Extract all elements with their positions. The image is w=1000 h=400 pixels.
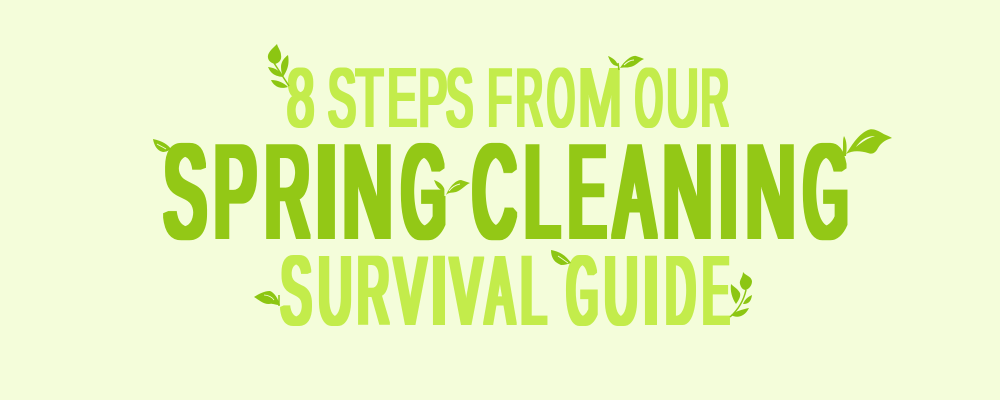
title line 1: 8 STEPS FROM OUR: U (667, 52, 699, 145)
title line 2: SPRING CLEANING: N (663, 119, 712, 266)
icon: leaf between G and C (434, 180, 470, 196)
title line 3: SURVIVAL GUIDE: E (703, 236, 729, 345)
title line 1: 8 STEPS FROM OUR: R (701, 50, 729, 144)
title line 2: SPRING CLEANING: I (718, 118, 739, 265)
title line 1: 8 STEPS FROM OUR (287, 50, 729, 145)
icon: leaf on M (608, 56, 644, 70)
title line 1: 8 STEPS FROM OUR: E (388, 52, 417, 145)
title line 2: SPRING CLEANING: E (569, 118, 605, 266)
icon: leaf on S (153, 139, 171, 152)
title line 1: 8 STEPS FROM OUR: S (328, 51, 356, 144)
title line 2: SPRING CLEANING (164, 117, 848, 266)
title line 3: SURVIVAL GUIDE: R (358, 236, 389, 345)
title line 1: 8 STEPS FROM OUR: S (446, 51, 473, 144)
title line 3: SURVIVAL GUIDE: U (604, 237, 638, 346)
title line 2: SPRING CLEANING: I (313, 118, 340, 266)
title line 2: SPRING CLEANING: C (473, 118, 515, 265)
title line 2: SPRING CLEANING: P (214, 117, 256, 265)
title line 2: SPRING CLEANING: G (804, 119, 848, 266)
title line 3: SURVIVAL GUIDE: D (666, 236, 695, 345)
title line 3: SURVIVAL GUIDE: V (395, 237, 426, 346)
title line 2: SPRING CLEANING: S (164, 117, 206, 265)
title line 1: 8 STEPS FROM OUR: P (419, 51, 447, 144)
title line 1: 8 STEPS FROM OUR: F (488, 50, 512, 144)
icon: leaf bottom left on S (254, 291, 280, 306)
title line 3: SURVIVAL GUIDE: U (318, 237, 352, 346)
title line 3: SURVIVAL GUIDE: S (281, 238, 311, 346)
title line 2: SPRING CLEANING: N (343, 119, 392, 266)
title line 2: SPRING CLEANING: G (402, 119, 446, 266)
title line 1: 8 STEPS FROM OUR: O (635, 52, 662, 144)
title line 3: SURVIVAL GUIDE: I (430, 237, 448, 345)
icon: leaf sprig right of E (730, 272, 752, 317)
icon: leaf above G of GUIDE (551, 250, 571, 265)
title line 1: 8 STEPS FROM OUR: 8 (287, 52, 314, 144)
title line 3: SURVIVAL GUIDE: G (567, 236, 598, 345)
icon: leaf sprig top left (268, 44, 289, 88)
title line 1: 8 STEPS FROM OUR: R (516, 51, 543, 144)
icon: large leaf on final G (842, 129, 892, 156)
title line 1: 8 STEPS FROM OUR: O (547, 52, 574, 144)
title line 1: 8 STEPS FROM OUR: T (356, 52, 383, 145)
title line 1: 8 STEPS FROM OUR: M (578, 51, 622, 144)
title line 3: SURVIVAL GUIDE: V (451, 237, 482, 346)
title line 2: SPRING CLEANING: N (746, 119, 795, 266)
title line 3: SURVIVAL GUIDE: L (521, 237, 546, 346)
title line 2: SPRING CLEANING: L (524, 117, 559, 265)
title line 3: SURVIVAL GUIDE: I (642, 237, 660, 345)
title line 2: SPRING CLEANING: A (615, 118, 654, 265)
title line 2: SPRING CLEANING: R (265, 118, 309, 265)
title line 3: SURVIVAL GUIDE (281, 236, 729, 346)
title line 3: SURVIVAL GUIDE: A (486, 236, 514, 345)
